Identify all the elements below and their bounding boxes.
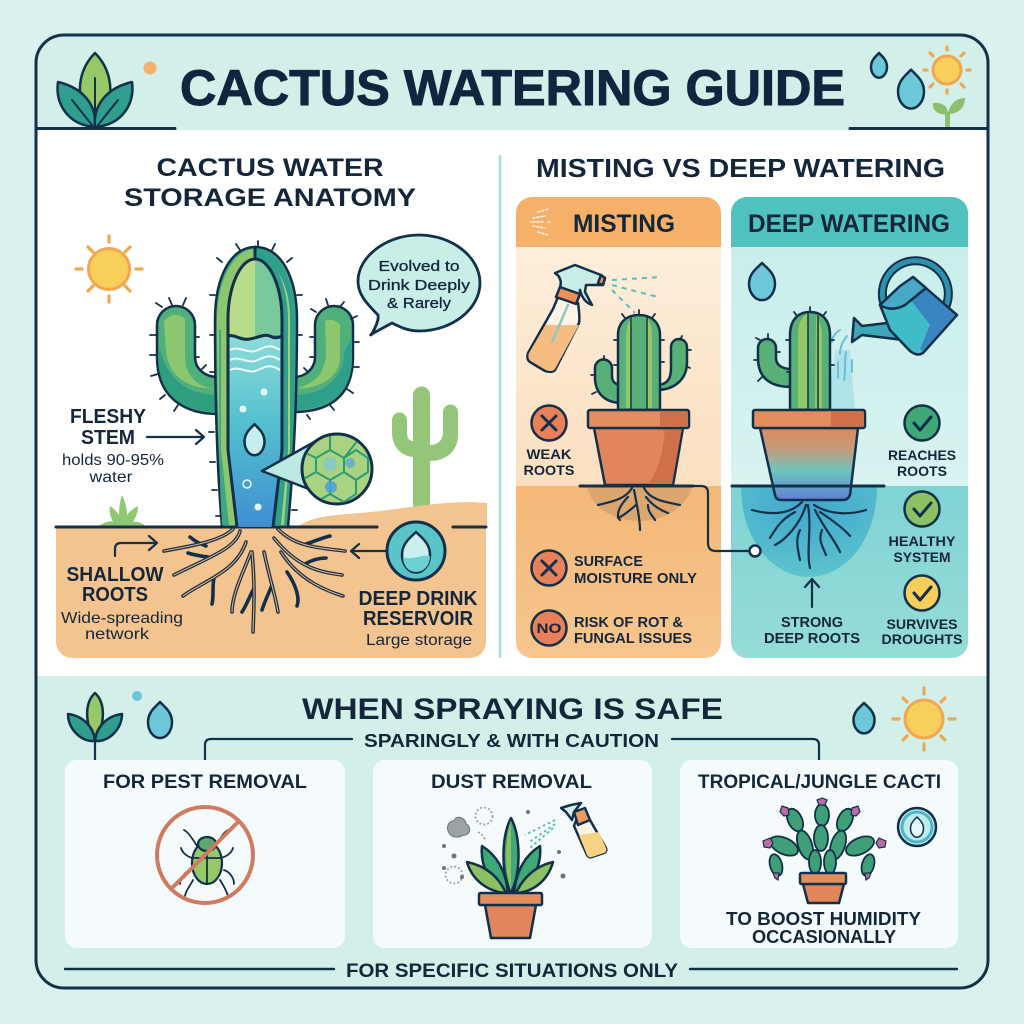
icon: header sun (924, 47, 970, 93)
spines (150, 241, 359, 516)
card: pest removal (65, 760, 345, 948)
caption: OCCASIONALLY (752, 927, 896, 947)
icon: blue dot (132, 691, 142, 701)
inner column top (228, 259, 255, 339)
ground line (580, 484, 884, 488)
label: fleshy stem: FLESHY (70, 406, 147, 428)
misting body (516, 246, 721, 486)
panel: when spraying is safe (65, 688, 958, 982)
icon: mist spray (530, 209, 552, 235)
status: weak roots: WEAK (526, 446, 572, 462)
status: survives droughts (882, 576, 962, 647)
deep label: DEEP WATERING (748, 210, 950, 238)
label: strong deep roots: STRONG (781, 614, 843, 631)
stream dashes (832, 330, 852, 380)
label: shallow roots: Wide-spreading (61, 610, 183, 627)
status: healthy system: HEALTHY (888, 533, 956, 549)
status: surface moisture only (532, 550, 697, 587)
deep header (731, 197, 968, 247)
icon: reservoir drop (387, 522, 445, 580)
icon: small drop (871, 53, 887, 78)
strong deep roots (752, 502, 866, 568)
label: fleshy stem: holds 90-95% (62, 452, 164, 469)
misting soil (516, 486, 721, 658)
status: rot risk: FUNGAL ISSUES (574, 630, 692, 647)
icon: orange dot (144, 62, 156, 74)
icon: left drop (148, 702, 172, 738)
misting label: MISTING (573, 210, 675, 238)
panel: deep watering (580, 197, 968, 658)
status: surface moisture only: SURFACE (574, 553, 643, 570)
label: fleshy stem: STEM (81, 427, 135, 449)
main cactus (150, 241, 359, 527)
status: reaches roots: ROOTS (897, 463, 947, 479)
callout: cell magnifier (262, 434, 372, 504)
card: tropical cacti: TROPICAL/JUNGLE CACTI (698, 772, 941, 793)
status: healthy system (888, 492, 956, 565)
trunk (215, 247, 297, 527)
moist soil glow (741, 487, 877, 577)
divider (499, 155, 501, 658)
card: dust removal (373, 760, 652, 948)
icon: drop (749, 263, 775, 300)
status: surface moisture only: MOISTURE ONLY (574, 570, 697, 587)
shallow roots (598, 488, 680, 530)
label: fleshy stem: water (88, 469, 133, 486)
left arm (157, 306, 218, 414)
arrow: from reservoir (351, 544, 386, 558)
status: healthy system: SYSTEM (894, 549, 950, 565)
icon: spray bottle (527, 265, 662, 372)
icon: deep pot (753, 410, 865, 500)
caption: TO BOOST HUMIDITY (726, 909, 921, 929)
icon: no bugs (157, 807, 253, 903)
label: shallow roots: network (85, 626, 150, 643)
connector line (693, 486, 760, 556)
icon: humidity drop (898, 808, 936, 846)
icon: header leaves (58, 53, 132, 127)
card: tropical cacti (680, 760, 958, 948)
heading: anatomy: STORAGE ANATOMY (124, 184, 416, 212)
icon: misting pot (588, 410, 689, 485)
roots (164, 529, 345, 632)
label: deep drink reservoir: RESERVOIR (363, 608, 474, 630)
label: fleshy stem (62, 406, 164, 486)
caption (726, 909, 921, 947)
footer note: FOR SPECIFIC SITUATIONS ONLY (346, 961, 678, 982)
label: deep drink reservoir: Large storage (366, 632, 472, 649)
right arm (294, 306, 353, 412)
icon: dust plant (467, 818, 553, 938)
status: rot risk: NO (536, 620, 562, 636)
connector bracket (205, 739, 819, 760)
status: survives droughts: DROUGHTS (882, 631, 962, 647)
icon: right drop (854, 703, 874, 733)
bubbles (240, 388, 268, 510)
panel: cactus water storage anatomy (56, 154, 487, 658)
icon: header sprout (933, 98, 965, 128)
title: CACTUS WATERING GUIDE (180, 60, 845, 116)
water ripples (230, 346, 280, 371)
status: rot risk: RISK OF ROT & (574, 614, 683, 631)
icon: right sun (893, 688, 955, 750)
status: reaches roots: REACHES (888, 447, 956, 463)
card: pest removal: FOR PEST REMOVAL (103, 772, 307, 793)
panel: white content area (37, 130, 987, 676)
speech bubble: Drink Deeply (368, 277, 471, 294)
icon: left sprig (68, 693, 122, 760)
heading: anatomy (124, 154, 416, 212)
status: rot risk (532, 610, 692, 647)
icon: deep cactus (754, 307, 834, 410)
label: shallow roots: ROOTS (82, 584, 148, 606)
icon: large drop (898, 70, 924, 109)
icon: watering can (852, 261, 957, 354)
label: deep drink reservoir (358, 588, 478, 649)
arrow: to shallow roots (115, 536, 157, 556)
ground lines (56, 526, 486, 528)
heading: spraying: WHEN SPRAYING IS SAFE (302, 693, 723, 726)
sand mound (296, 502, 487, 528)
icon: misting cactus (591, 310, 691, 410)
label: shallow roots (61, 564, 183, 643)
heading: anatomy: CACTUS WATER (156, 154, 384, 182)
desert cactus silhouette (392, 386, 458, 510)
status: reaches roots (888, 406, 956, 479)
status: weak roots: ROOTS (524, 462, 574, 478)
label: deep drink reservoir: DEEP DRINK (358, 588, 478, 610)
label: strong deep roots: DEEP ROOTS (764, 630, 860, 647)
shallow root shade (587, 487, 692, 521)
speech bubble: & Rarely (387, 295, 452, 312)
deep soil (731, 486, 968, 658)
panel: misting (516, 197, 721, 658)
subheading: SPARINGLY & WITH CAUTION (364, 731, 659, 751)
speech bubble: Evolved to (378, 258, 460, 275)
heading: misting vs deep watering: MISTING VS DEEP WATERING (536, 153, 945, 183)
footer rules (65, 968, 957, 970)
status: survives droughts: SURVIVES (886, 616, 958, 632)
grass tuft (97, 495, 147, 527)
deep body (731, 246, 968, 486)
soil (56, 527, 486, 658)
icon: dust clouds (442, 808, 566, 884)
arrow: up to roots (805, 579, 819, 607)
icon: dust spray bottle (525, 803, 606, 857)
card: dust removal: DUST REMOVAL (431, 772, 592, 793)
label: strong deep roots (764, 614, 860, 647)
header rules (37, 127, 987, 130)
misting header (516, 197, 721, 247)
icon: sun (76, 236, 142, 302)
label: shallow roots: SHALLOW (66, 564, 164, 586)
arrow: to stem (147, 430, 204, 444)
water drop (244, 424, 264, 455)
water stream (825, 350, 855, 410)
water column (228, 335, 282, 527)
status: weak roots (524, 406, 574, 478)
speech bubble (358, 235, 480, 335)
icon: jungle cactus (763, 798, 886, 903)
